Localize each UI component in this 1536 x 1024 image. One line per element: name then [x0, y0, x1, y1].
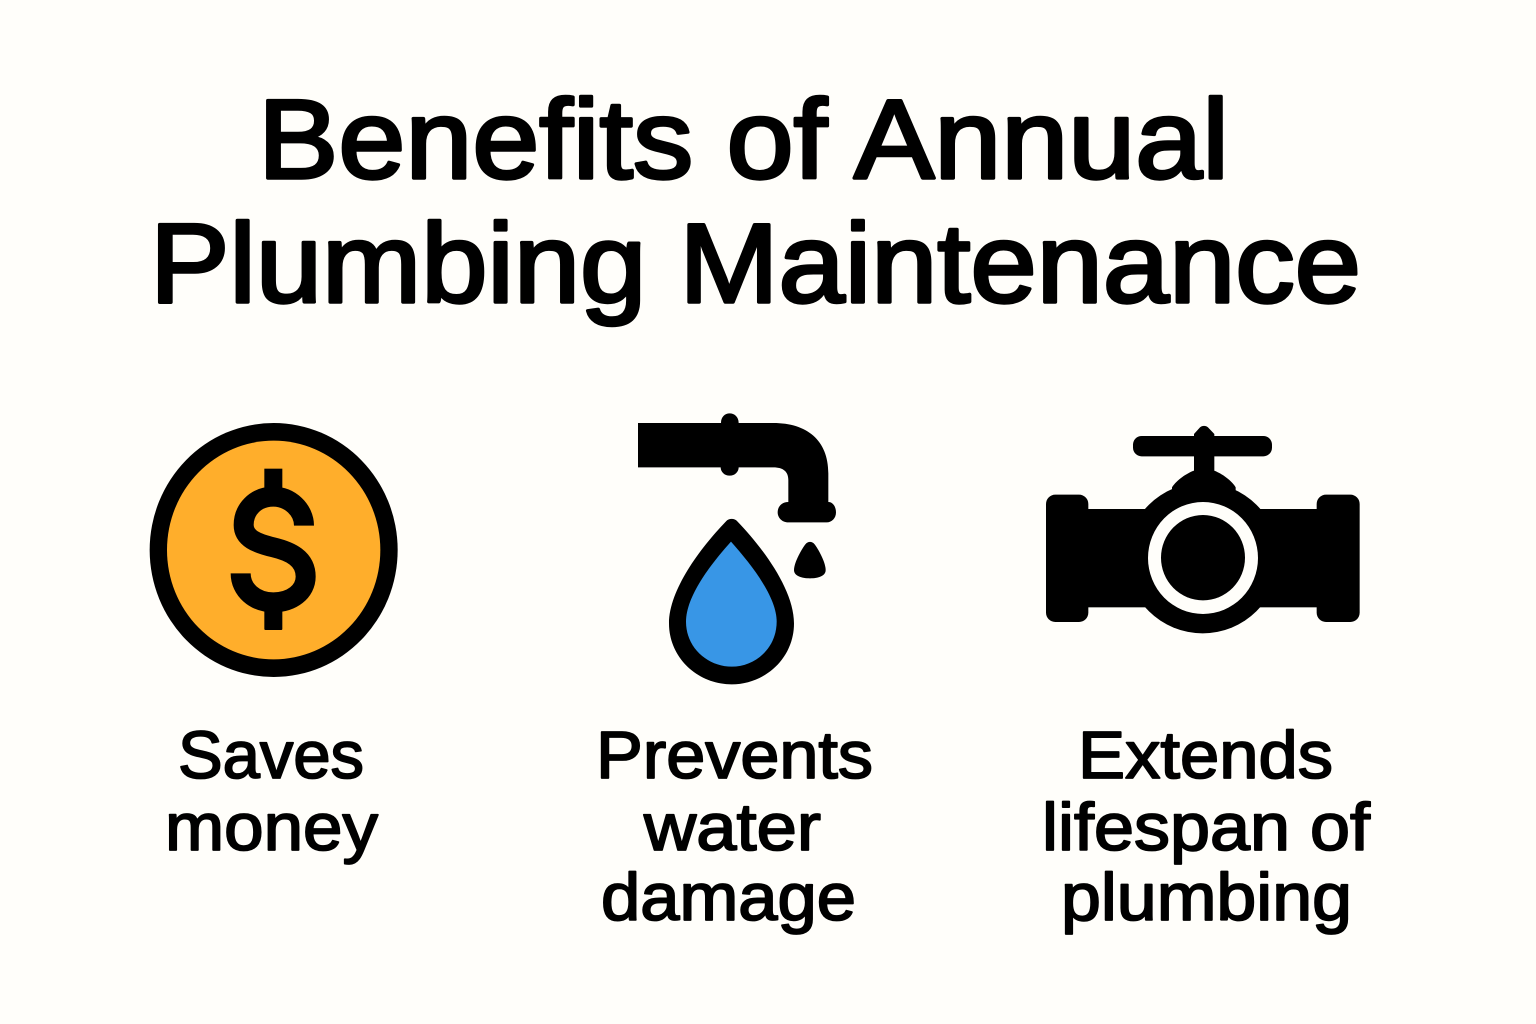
panel: extends lifespan of plumbing: [1042, 426, 1370, 935]
icon: dollar coin: [150, 423, 398, 677]
title: [150, 77, 1361, 326]
title: Plumbing Maintenance: [150, 201, 1361, 326]
label: prevents water damage: [596, 718, 873, 935]
label: saves money: [165, 718, 379, 865]
panel: saves money: [150, 423, 398, 865]
label: saves money: money: [165, 790, 379, 865]
icon: faucet and water drops: [638, 413, 836, 684]
label: prevents water damage: water: [643, 790, 821, 865]
title: Benefits of Annual: [258, 77, 1229, 202]
label: extends lifespan of plumbing: Extends: [1078, 718, 1333, 793]
label: saves money: Saves: [178, 718, 364, 793]
label: extends lifespan of plumbing: lifespan of: [1042, 790, 1370, 865]
label: prevents water damage: damage: [601, 860, 856, 935]
label: prevents water damage: Prevents: [596, 718, 873, 793]
icon: pipe valve: [1046, 426, 1360, 633]
label: extends lifespan of plumbing: [1042, 718, 1370, 935]
panel: prevents water damage: [596, 413, 873, 935]
label: extends lifespan of plumbing: plumbing: [1061, 860, 1352, 935]
